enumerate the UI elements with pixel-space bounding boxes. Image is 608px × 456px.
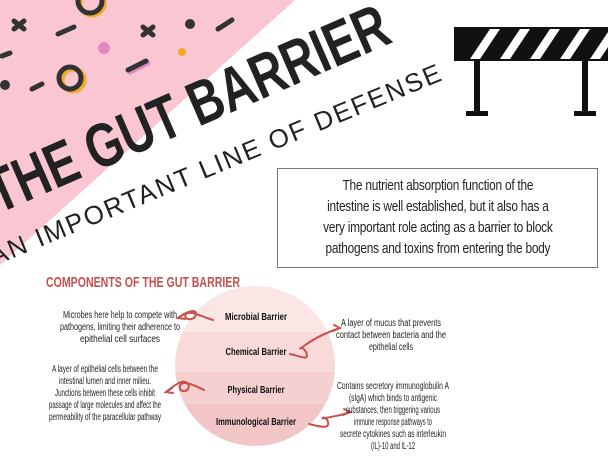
callout texts: A layer of mucus that prevents <box>341 318 441 329</box>
callout texts: substances, then triggering various <box>346 405 440 416</box>
callout texts: contact between bacteria and the <box>336 330 446 341</box>
section heading: COMPONENTS OF THE GUT BARRIER <box>46 274 240 291</box>
callout texts: passage of large molecules and affect the <box>49 400 161 411</box>
callout texts: (IL)-10 and IL-12 <box>371 441 415 452</box>
callout texts: Junctions between these cells inhibit <box>55 388 155 399</box>
callout texts: A layer of epithelial cells between the <box>52 364 158 375</box>
callout texts: Contains secretory immunoglobulin A <box>337 381 449 392</box>
intro text box: very important role acting as a barrier to block <box>323 220 552 236</box>
diagram: layered circle: Physical Barrier <box>228 384 284 396</box>
callout texts: intestinal lumen and inner milieu. <box>59 376 151 387</box>
decorative confetti <box>0 0 232 91</box>
callout texts: Microbes here help to compete with <box>63 310 177 321</box>
intro text box <box>277 168 598 268</box>
callout texts: immune response pathways to <box>354 417 432 428</box>
intro text box: pathogens and toxins from entering the body <box>325 241 550 257</box>
icon: barricade <box>454 27 608 116</box>
callout texts: pathogens, limiting their adherence to <box>60 322 180 333</box>
callout texts: (sIgA) which binds to antigenic <box>349 393 437 404</box>
intro text box: The nutrient absorption function of the <box>342 178 533 194</box>
diagram: layered circle: Immunological Barrier <box>216 416 296 428</box>
intro text box: intestine is well established, but it also has a <box>327 199 548 215</box>
diagram: layered circle: Chemical Barrier <box>226 346 286 358</box>
callout texts: epithelial cells <box>369 342 413 353</box>
callout texts: epithelial cell surfaces <box>80 334 160 345</box>
diagram: layered circle <box>175 286 335 446</box>
diagram: layered circle: Microbial Barrier <box>225 311 287 323</box>
callout texts: permeability of the paracellular pathway <box>49 412 161 423</box>
callout texts: secrete cytokines such as interleukin <box>340 429 446 440</box>
pink background triangle <box>0 0 295 265</box>
arrows <box>166 311 350 427</box>
callout texts <box>49 310 449 452</box>
